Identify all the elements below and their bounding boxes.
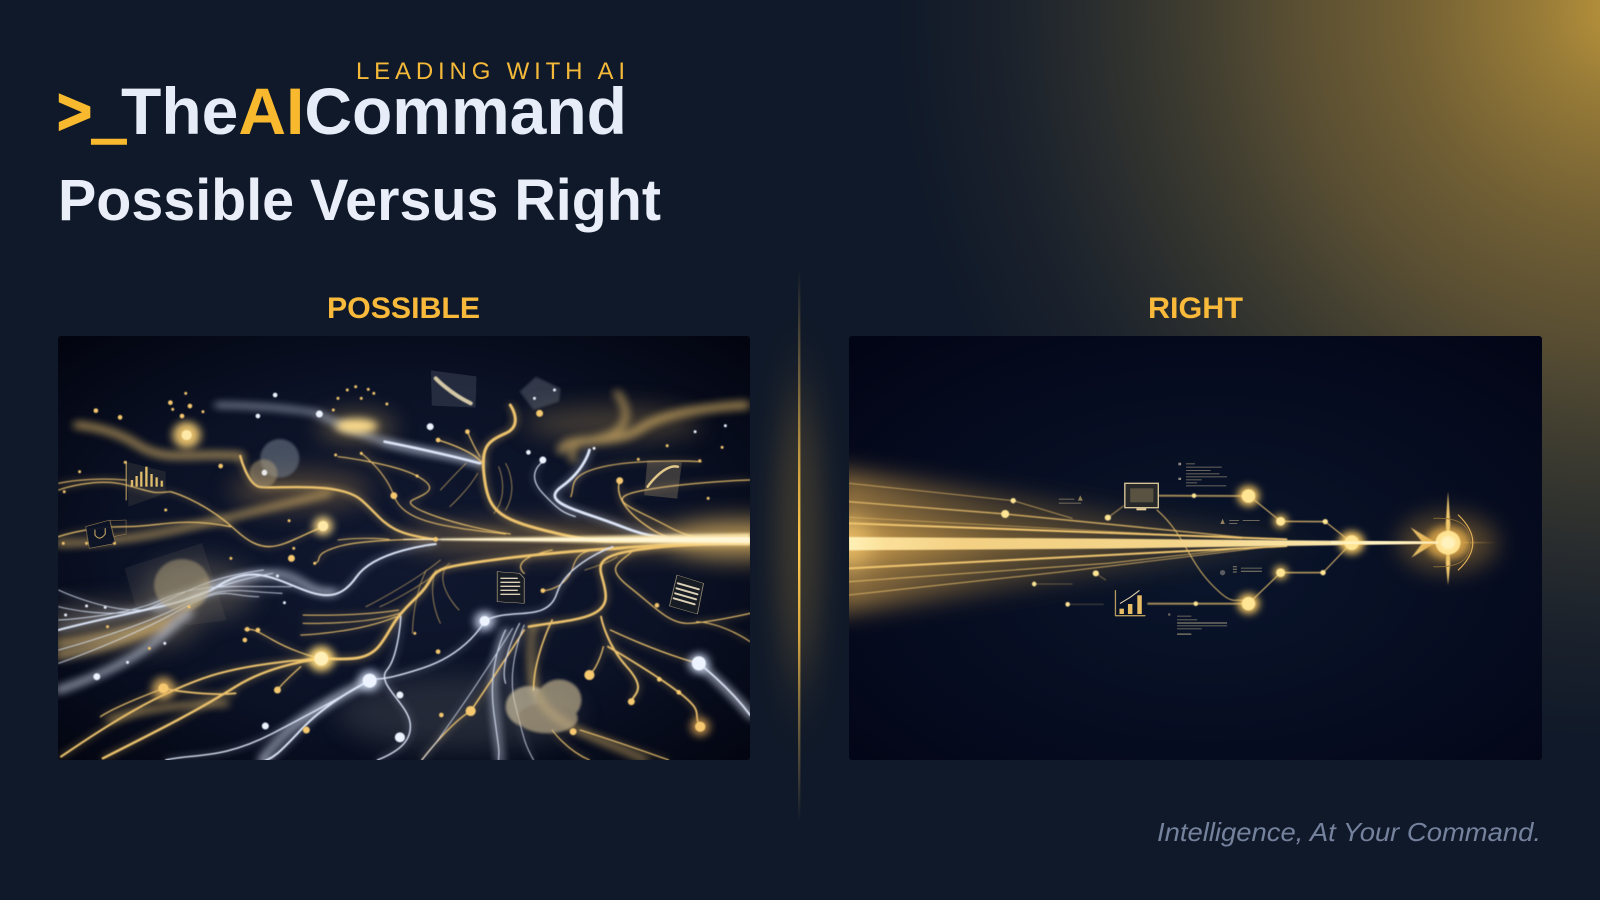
header: brand logo bbox=[57, 58, 627, 149]
column heading: right: RIGHT bbox=[1148, 292, 1243, 325]
icon: golden mountain card bbox=[644, 461, 682, 498]
bright core of the converging beam bbox=[403, 533, 750, 545]
floating data icons bbox=[86, 371, 703, 733]
tagline: Intelligence, At Your Command. bbox=[1157, 817, 1541, 847]
gold nodes bbox=[62, 385, 724, 735]
arrowhead bbox=[1411, 527, 1436, 558]
logo wordmark: TheAICommand bbox=[121, 74, 627, 148]
icon: cloudy orb bbox=[506, 679, 581, 733]
small text-like annotations bbox=[1059, 463, 1262, 635]
soft out-of-focus bands bbox=[59, 393, 752, 763]
main beam bbox=[849, 537, 1438, 550]
bright node halos bbox=[152, 419, 710, 736]
icon: document right bbox=[669, 575, 703, 614]
icon: glass sphere bbox=[250, 439, 299, 487]
icon: top chart card bbox=[431, 371, 476, 407]
center divider bbox=[775, 270, 823, 822]
panel: right, single focused beam bbox=[818, 336, 1542, 760]
logo prompt chevron: > bbox=[57, 74, 92, 148]
white nodes bbox=[64, 388, 727, 742]
wide beam glow bbox=[818, 470, 1331, 613]
title: Possible Versus Right bbox=[58, 168, 661, 233]
converging light rays bbox=[849, 483, 1352, 604]
sharp filament strands bbox=[59, 405, 750, 762]
icon: top right data card bbox=[520, 377, 561, 410]
glow of main streams bbox=[59, 405, 750, 762]
logo prompt underscore: _ bbox=[92, 75, 126, 149]
corner gold glow bbox=[880, 0, 1600, 750]
eyebrow: leading with AI: LEADING WITH AI bbox=[356, 58, 625, 85]
node halos bbox=[1238, 486, 1364, 614]
icon: growth bar chart bbox=[1115, 591, 1145, 616]
icon: document center bbox=[497, 572, 524, 603]
broad background glow bbox=[40, 407, 813, 750]
icon: bar chart card bbox=[126, 462, 166, 507]
panel: possible, branching light streams bbox=[58, 336, 750, 760]
branching streams bbox=[58, 370, 750, 760]
icon: left shield card bbox=[86, 520, 126, 548]
icon: monitor bbox=[1125, 483, 1158, 510]
fine particle fans bbox=[366, 463, 617, 633]
icon: translucent card and orb bbox=[125, 543, 226, 625]
panel background bbox=[849, 336, 1542, 760]
panel background bbox=[58, 336, 750, 760]
circuit nodes bbox=[1001, 489, 1359, 610]
column heading: possible: POSSIBLE bbox=[327, 292, 480, 325]
target star burst bbox=[1399, 492, 1497, 585]
right ending of the beam bbox=[1331, 541, 1438, 544]
